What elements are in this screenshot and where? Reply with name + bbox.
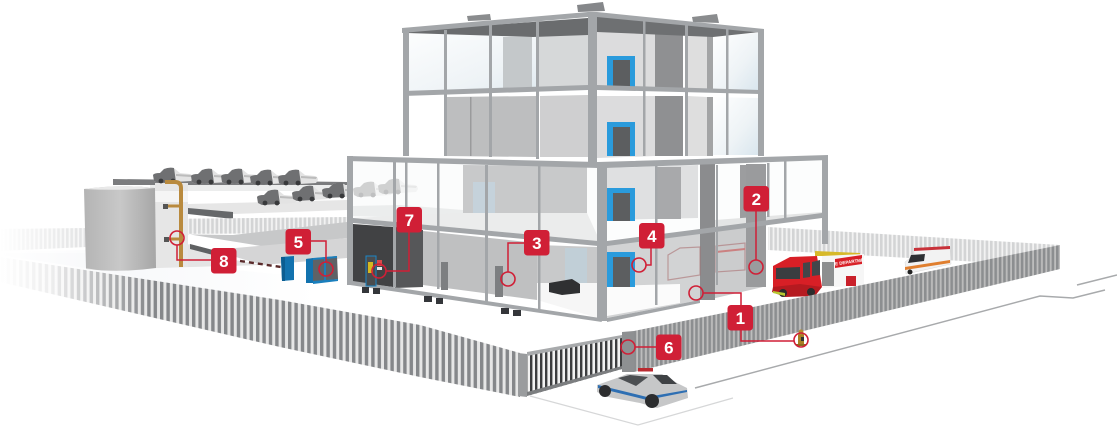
road edges: [530, 275, 1117, 425]
mid floor left face: [407, 89, 588, 155]
callout 8: [170, 231, 236, 274]
ramp decks: [155, 222, 347, 247]
blue door top floor: [607, 56, 635, 87]
first floor slab top left: [353, 213, 598, 241]
frame: [347, 155, 828, 322]
first floor right glass: [607, 157, 828, 240]
water tank: [84, 186, 156, 271]
callout 6: [621, 334, 682, 360]
callout 2: [744, 186, 769, 274]
right fence: [634, 245, 1060, 372]
front left fence: [0, 255, 520, 397]
callout 1: [689, 286, 808, 347]
column: [155, 183, 188, 267]
blue door first floor: [607, 188, 635, 221]
callout 1: 1: [736, 309, 745, 328]
fire hydrant: [796, 330, 806, 346]
callout 4: [632, 223, 664, 272]
ground floor left dark walls: [353, 224, 393, 287]
ghost cars through glass: [353, 179, 418, 197]
first floor left glass: [353, 160, 598, 241]
parking structure: [113, 179, 347, 268]
building upper floors: [402, 2, 764, 162]
control cabinet: [306, 256, 338, 284]
top deck: [113, 179, 347, 185]
fire engine: [772, 251, 870, 297]
callout 4: 4: [647, 227, 657, 246]
rooftop units: [467, 14, 491, 21]
parked cars top row: [153, 168, 318, 185]
callout 7: [372, 207, 422, 278]
foot pads: [362, 287, 521, 316]
roof underside left: [407, 18, 588, 37]
sliding gate: [518, 331, 634, 397]
top floor left face glass: [407, 18, 588, 95]
ghost fire truck: [668, 243, 745, 280]
police car: [597, 368, 688, 408]
top floor right face: [597, 16, 760, 90]
callout 5: 5: [294, 233, 303, 252]
fire water pipe: [163, 182, 182, 267]
parked cars second row: [257, 183, 362, 205]
fire alarm panel: [366, 256, 382, 286]
back fence left: [0, 226, 86, 253]
callout 3: [501, 230, 550, 286]
ambulance: [905, 246, 951, 274]
frame: [402, 12, 764, 162]
ground and first floors: [347, 155, 828, 322]
ground plane: [0, 250, 1060, 398]
fire department lettering: FIRE DEPARTMENT: [828, 257, 870, 267]
callout 3: 3: [532, 234, 542, 253]
blue door mid floor: [607, 122, 635, 156]
mid floor right face: [597, 90, 760, 158]
callout 2: 2: [752, 190, 761, 209]
callout 5: [286, 229, 333, 276]
sofa: [549, 279, 580, 295]
blue door ground floor: [607, 252, 635, 287]
boom barrier: [240, 256, 294, 281]
ground floor right: [607, 230, 700, 318]
callout 6: 6: [664, 338, 674, 358]
callout 7: 7: [405, 211, 414, 230]
back fence right: [768, 227, 1060, 262]
callout 8: 8: [219, 252, 229, 271]
